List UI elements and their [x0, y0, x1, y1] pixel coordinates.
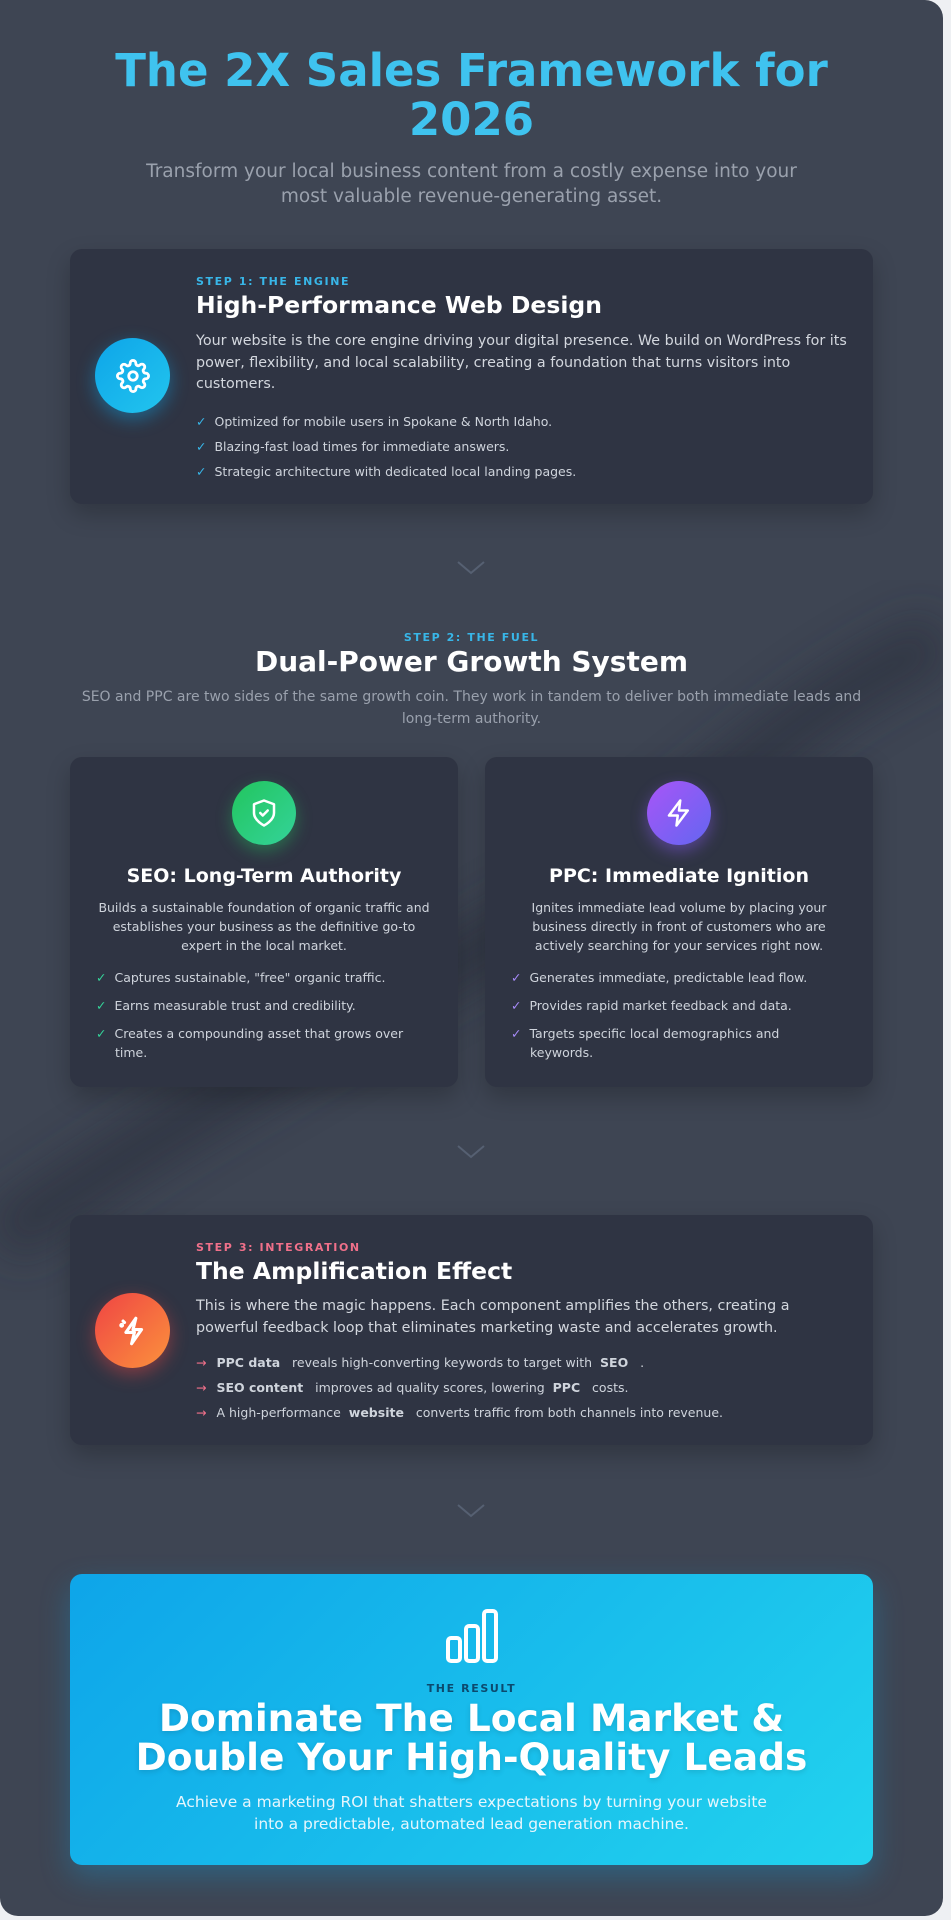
subtitle [146, 161, 797, 207]
bullet list: ✓ Strategic architecture with dedicated local landing pages. [196, 464, 576, 479]
bullet list: ✓ Earns measurable trust and credibility. [96, 998, 356, 1013]
bullet list: ✓ Blazing-fast load times for immediate answers. [196, 439, 509, 454]
heading: SEO: Long-Term Authority [127, 865, 401, 887]
bullet list [96, 970, 404, 1060]
arrow 1 [458, 562, 484, 574]
result heading: Dominate The Local Market & [159, 1696, 784, 1740]
subtitle: Transform your local business content from a costly expense into your [146, 161, 797, 182]
title [115, 44, 828, 146]
title: 2026 [409, 93, 534, 146]
panel: step 3 [70, 1215, 873, 1445]
result description [176, 1793, 767, 1833]
step 2 label: STEP 2: THE FUEL [404, 631, 539, 644]
bullet list: ✓ Creates a compounding asset that grows over time. [96, 1026, 403, 1060]
bullet list: ✓ Provides rapid market feedback and data. [511, 998, 792, 1013]
bullet list: ✓ Generates immediate, predictable lead flow. [511, 970, 807, 985]
step 2 description [82, 689, 861, 727]
bullet list: ✓ Optimized for mobile users in Spokane & North Idaho. [196, 414, 552, 429]
description: This is where the magic happens. Each component amplifies the others, creating a powerful feedback loop that eliminates marketing waste and accelerates growth. [196, 1298, 790, 1336]
result heading [136, 1696, 807, 1782]
panel: step 1 [70, 249, 873, 504]
bullet list [511, 970, 807, 1060]
arrow list: → PPC data reveals high-converting keywords to target with SEO . [196, 1355, 644, 1370]
icon: bar chart [446, 1609, 498, 1663]
panel: PPC [485, 757, 873, 1087]
step 2 description: long-term authority. [402, 711, 541, 727]
heading: The Amplification Effect [196, 1257, 512, 1285]
icon: gear [95, 338, 170, 413]
result heading: Double Your High-Quality Leads [136, 1735, 807, 1779]
bullet list: ✓ Targets specific local demographics and keywords. [511, 1026, 779, 1060]
arrow list: → A high-performance website converts traffic from both channels into revenue. [196, 1405, 723, 1420]
arrow 2 [458, 1146, 484, 1158]
description: Your website is the core engine driving your digital presence. We build on WordPress for its power, flexibility, and local scalability, creating a foundation that turns visitors into customers. [196, 333, 847, 392]
title: The 2X Sales Framework for [115, 44, 828, 97]
result description: Achieve a marketing ROI that shatters expectations by turning your website [176, 1793, 767, 1811]
icon: bolt [647, 781, 711, 845]
panel: SEO [70, 757, 458, 1087]
bullet list [196, 414, 576, 479]
result description: into a predictable, automated lead generation machine. [254, 1815, 689, 1833]
icon: shield [232, 781, 296, 845]
panel: result [70, 1574, 873, 1865]
step label: STEP 1: THE ENGINE [196, 275, 350, 288]
arrow 3 [458, 1504, 484, 1517]
description: Builds a sustainable foundation of organic traffic and establishes your business as the definitive go-to expert in the local market. [98, 900, 430, 953]
description: Ignites immediate lead volume by placing your business directly in front of customers who are actively searching for your services right now. [532, 900, 826, 953]
result label: THE RESULT [427, 1682, 516, 1695]
heading: High-Performance Web Design [196, 291, 602, 319]
arrow list [196, 1355, 723, 1420]
bullet list: ✓ Captures sustainable, "free" organic traffic. [96, 970, 385, 985]
step label: STEP 3: INTEGRATION [196, 1241, 361, 1254]
heading: PPC: Immediate Ignition [549, 865, 809, 887]
icon: spark bolt [95, 1293, 170, 1368]
step 2 heading: Dual-Power Growth System [255, 645, 688, 678]
arrow list: → SEO content improves ad quality scores, lowering PPC costs. [196, 1380, 628, 1395]
subtitle: most valuable revenue-generating asset. [281, 186, 662, 207]
step 2 description: SEO and PPC are two sides of the same growth coin. They work in tandem to deliver both immediate leads and [82, 689, 861, 705]
